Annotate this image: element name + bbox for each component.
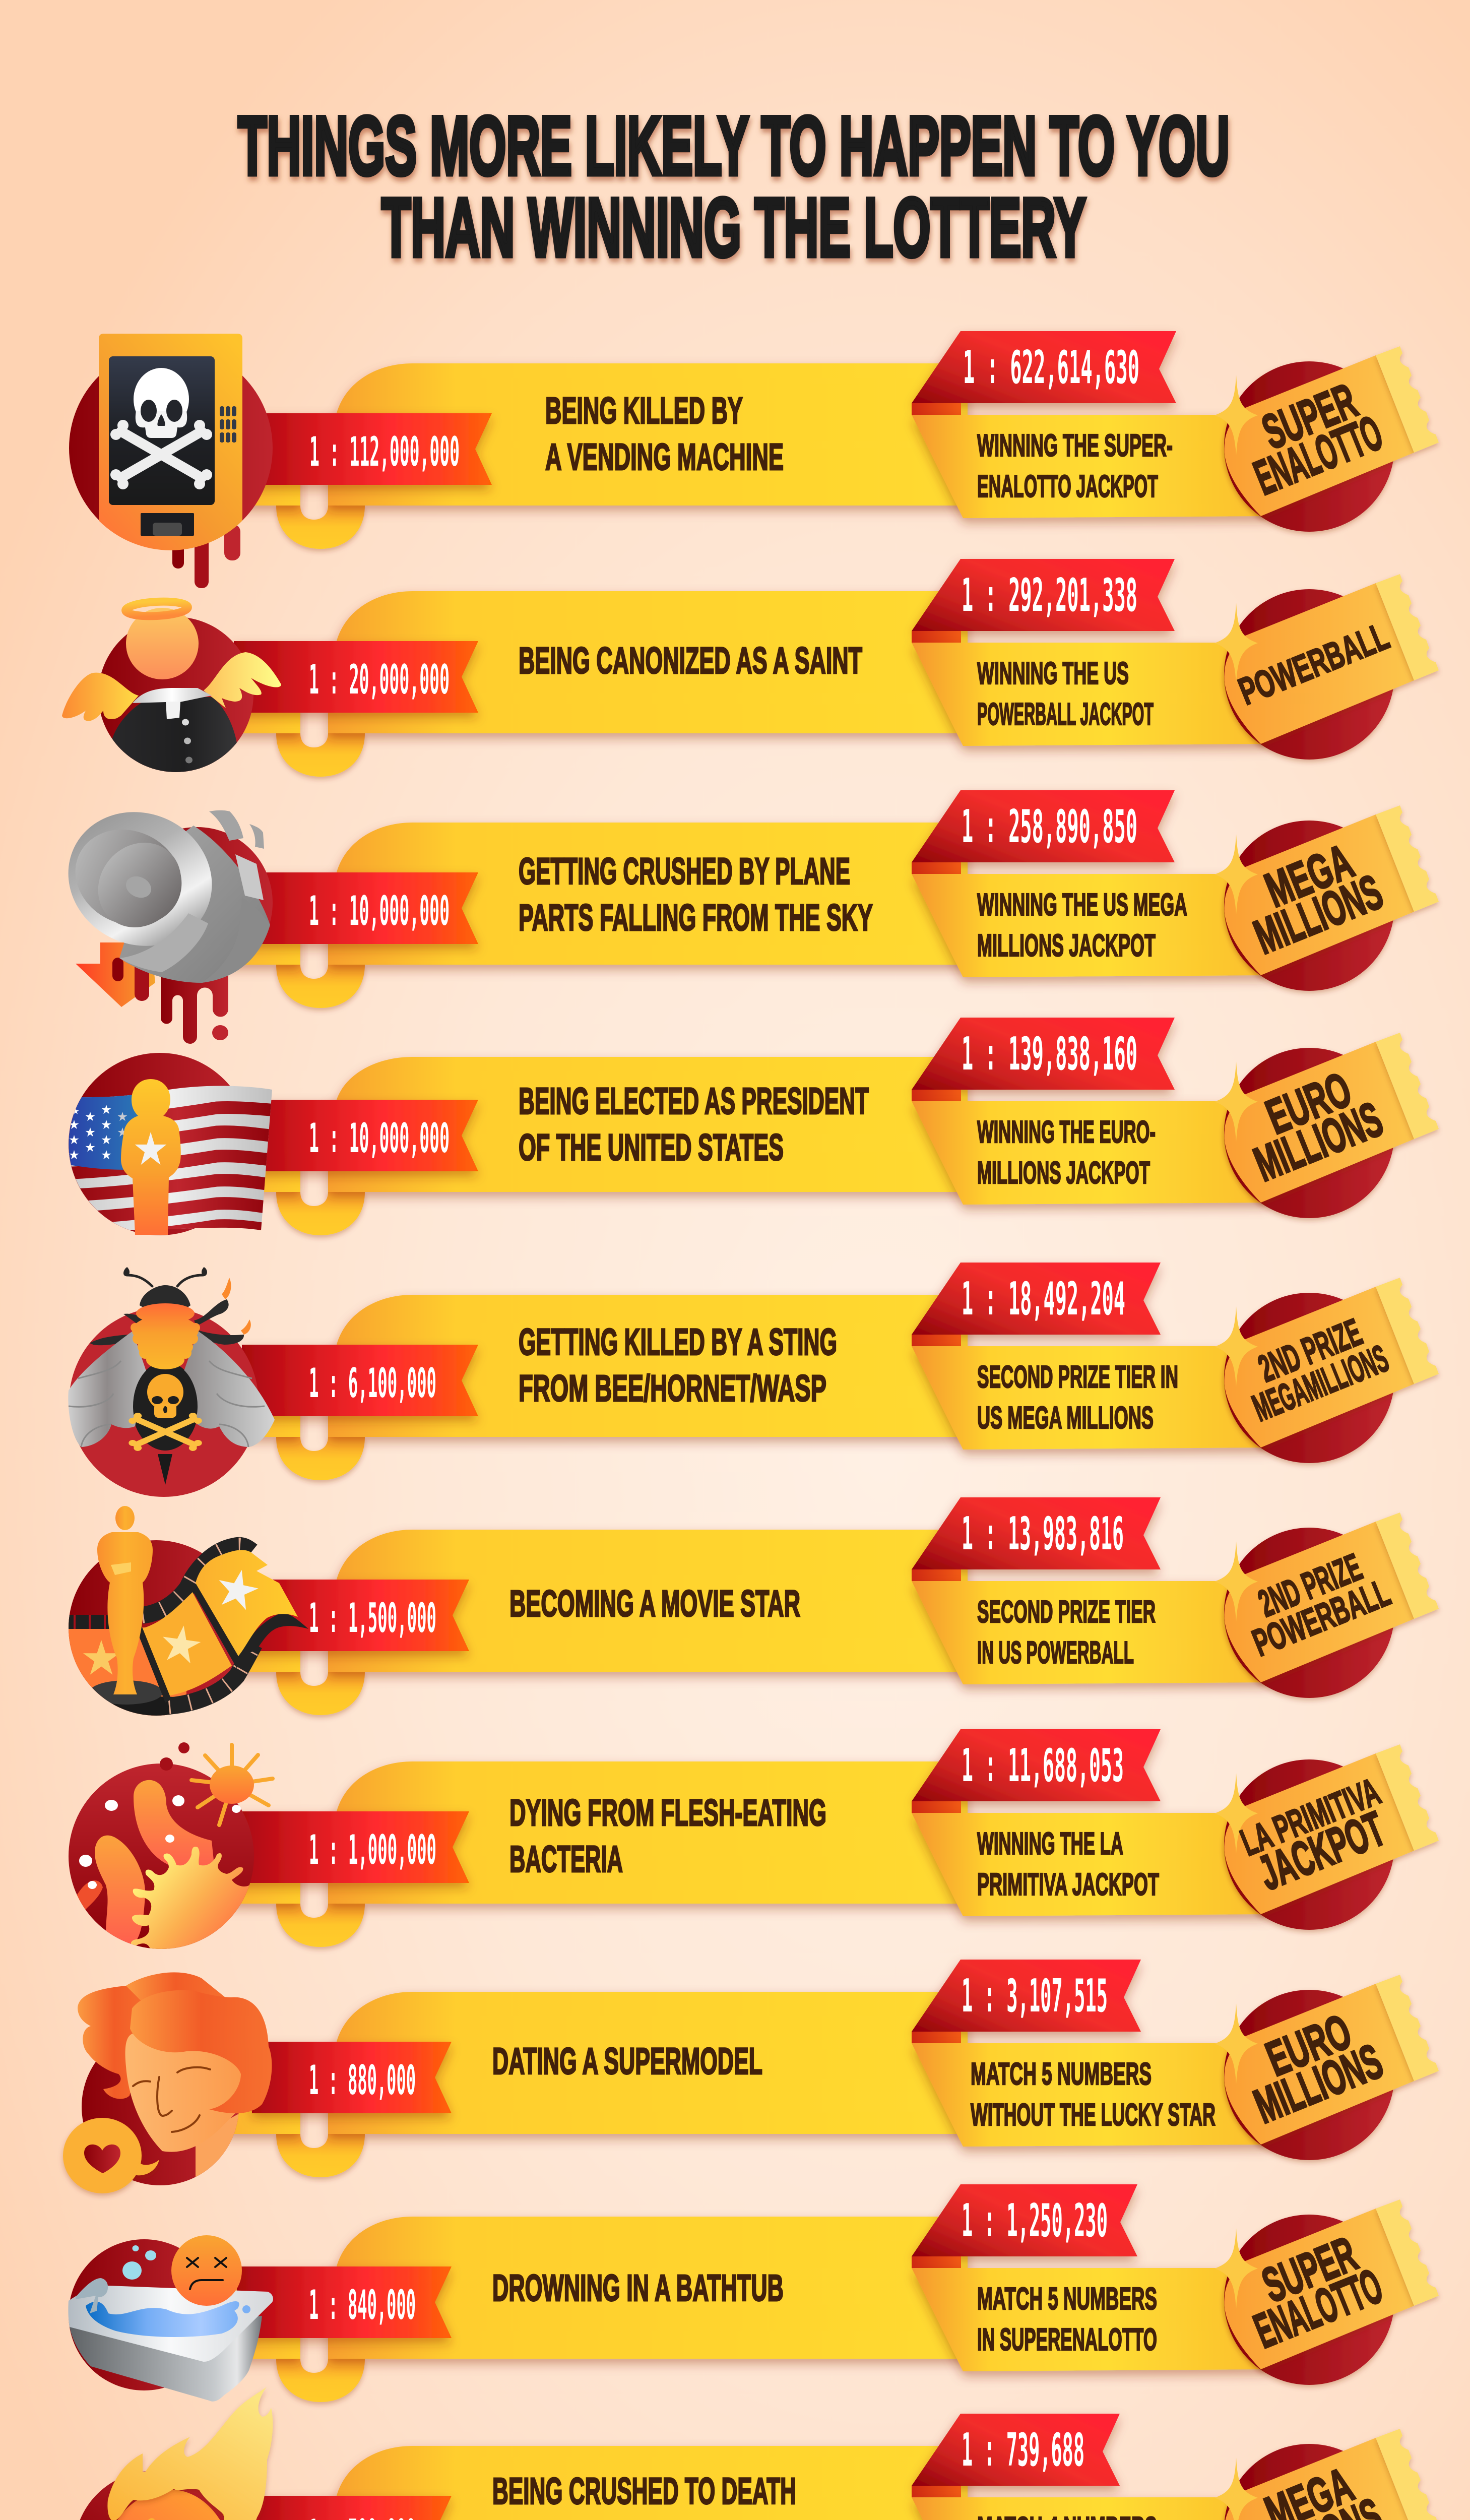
row 2 banners and text	[222, 559, 1439, 777]
row 5 banners and text: 1 : 18,492,204	[962, 1273, 1125, 1326]
row 4 banners and text	[222, 1018, 1439, 1235]
row 7 banners and text: DYING FROM FLESH-EATING	[509, 1792, 826, 1834]
row 6 banners and text: SECOND PRIZE TIER	[977, 1595, 1156, 1629]
row 7 banners and text: PRIMITIVA JACKPOT	[977, 1867, 1159, 1902]
row 2: canonized saint vs Powerball jackpot	[62, 559, 1439, 777]
row 1 banners and text: WINNING THE SUPER-	[977, 428, 1173, 463]
row 6 banners and text: 1 : 13,983,816	[962, 1507, 1124, 1560]
row 8 banners and text: DATING A SUPERMODEL	[492, 2040, 762, 2082]
row 3 banners and text: PARTS FALLING FROM THE SKY	[519, 897, 873, 938]
row 4 banners and text: EURO	[1259, 1061, 1359, 1145]
row 1 banners and text: ENALOTTO JACKPOT	[977, 469, 1158, 504]
row 6 banners and text: BECOMING A MOVIE STAR	[509, 1583, 800, 1624]
row 3 banners and text: MILLIONS JACKPOT	[977, 928, 1156, 963]
row 7 banners and text: 1 : 11,688,053	[962, 1739, 1124, 1792]
row 10: crushed by meteorite vs Mega Millions match 4	[69, 2387, 1439, 2520]
row 8 banners and text: WITHOUT THE LUCKY STAR	[971, 2098, 1216, 2132]
row 1 banners and text	[222, 331, 1439, 549]
row 2 banners and text: WINNING THE US	[977, 656, 1129, 691]
icon: president figure and US flag	[50, 1053, 282, 1241]
icon: jet engine falling	[46, 789, 273, 1044]
row 2 banners and text: 1 : 292,201,338	[962, 569, 1137, 622]
row 6: movie star vs second prize Powerball	[66, 1497, 1439, 1723]
row 3 banners and text	[222, 790, 1439, 1008]
row 6 banners and text: IN US POWERBALL	[977, 1635, 1134, 1670]
row 9 banners and text: SUPER	[1255, 2226, 1364, 2313]
row 5 banners and text: SECOND PRIZE TIER IN	[977, 1360, 1178, 1395]
icon: supermodel face with heart bubble	[63, 1972, 272, 2193]
row 4 banners and text: 1 : 10,000,000	[309, 1115, 450, 1162]
row 7 banners and text	[222, 1729, 1439, 1947]
row 7 banners and text: BACTERIA	[509, 1838, 623, 1880]
row 3 banners and text: 1 : 10,000,000	[309, 888, 450, 934]
row 2 banners and text: BEING CANONIZED AS A SAINT	[519, 640, 862, 681]
title	[238, 99, 1230, 274]
row 7 banners and text: 1 : 1,000,000	[309, 1826, 436, 1873]
icon: hornet with skull	[68, 1268, 275, 1497]
row 9 banners and text: 1 : 840,000	[309, 2282, 416, 2328]
row 5 banners and text: GETTING KILLED BY A STING	[519, 1321, 837, 1363]
icon: flaming meteorite	[69, 2387, 273, 2520]
icon: vending machine with skull	[69, 334, 273, 588]
row 4 banners and text: BEING ELECTED AS PRESIDENT	[519, 1080, 869, 1122]
row 3 banners and text: GETTING CRUSHED BY PLANE	[519, 850, 850, 892]
icon: saint with halo and wings	[62, 600, 281, 776]
row 10 banners and text: 1 : 739,688	[962, 2424, 1084, 2477]
row 5: killed by sting vs second prize Mega Millions	[68, 1263, 1439, 1497]
row 3: crushed by plane parts vs Mega Millions jackpot	[46, 789, 1439, 1044]
row 5 banners and text: US MEGA MILLIONS	[977, 1401, 1154, 1435]
row 6 banners and text: 2ND PRIZE	[1253, 1546, 1368, 1625]
row 4: elected president vs EuroMillions jackpot	[50, 1018, 1439, 1241]
row 1 banners and text: A VENDING MACHINE	[545, 436, 784, 478]
row 8: dating a supermodel vs EuroMillions match 5	[63, 1960, 1439, 2193]
row 2 banners and text: POWERBALL JACKPOT	[977, 697, 1154, 732]
row 5 banners and text: 1 : 6,100,000	[309, 1360, 436, 1407]
row 2 banners and text: 1 : 20,000,000	[309, 656, 450, 703]
row 3 banners and text: 1 : 258,890,850	[962, 800, 1137, 853]
row 9 banners and text: 1 : 1,250,230	[962, 2194, 1108, 2247]
row 9 banners and text: MATCH 5 NUMBERS	[977, 2282, 1157, 2316]
row 8 banners and text	[222, 1960, 1439, 2177]
row 1 banners and text: 1 : 622,614,630	[963, 341, 1139, 394]
row 8 banners and text: MATCH 5 NUMBERS	[971, 2057, 1152, 2092]
row 5 banners and text	[222, 1263, 1439, 1480]
row 5 banners and text: FROM BEE/HORNET/WASP	[519, 1367, 826, 1409]
row 9: drowning in a bathtub vs SuperEnalotto match 5	[68, 2184, 1439, 2402]
row 9 banners and text: DROWNING IN A BATHTUB	[492, 2267, 784, 2309]
row 1 banners and text: SUPER	[1255, 373, 1364, 460]
row 8 banners and text: 1 : 3,107,515	[962, 1970, 1108, 2023]
row 4 banners and text: WINNING THE EURO-	[977, 1115, 1156, 1150]
icon: bacteria and virus	[69, 1742, 273, 1956]
row 4 banners and text: OF THE UNITED STATES	[519, 1126, 784, 1168]
row 4 banners and text: MILLIONS JACKPOT	[977, 1156, 1150, 1190]
icon: bathtub with drowning face	[68, 2235, 273, 2402]
row 1 banners and text: BEING KILLED BY	[545, 390, 743, 431]
row 3 banners and text: WINNING THE US MEGA	[977, 888, 1187, 922]
row 1: vending machine vs SuperEnalotto jackpot	[69, 331, 1439, 588]
row 10 banners and text	[222, 2414, 1439, 2520]
row 9 banners and text: IN SUPERENALOTTO	[977, 2322, 1157, 2357]
row 8 banners and text: EURO	[1259, 2003, 1359, 2087]
row 6 banners and text: 1 : 1,500,000	[309, 1595, 436, 1642]
row 3 banners and text: MEGA	[1258, 834, 1361, 918]
row 7: flesh-eating bacteria vs La Primitiva jackpot	[69, 1729, 1439, 1956]
row 10 banners and text: BEING CRUSHED TO DEATH	[492, 2470, 796, 2512]
row 8 banners and text: 1 : 880,000	[309, 2057, 416, 2104]
row 9 banners and text	[222, 2184, 1439, 2402]
row 5 banners and text: 2ND PRIZE	[1253, 1311, 1368, 1391]
row 6 banners and text	[222, 1497, 1439, 1715]
row 7 banners and text: WINNING THE LA	[977, 1826, 1123, 1861]
row 1 banners and text: 1 : 112,000,000	[309, 428, 460, 475]
icon: award statuette and film strip	[66, 1506, 308, 1723]
row 4 banners and text: 1 : 139,838,160	[962, 1028, 1137, 1081]
